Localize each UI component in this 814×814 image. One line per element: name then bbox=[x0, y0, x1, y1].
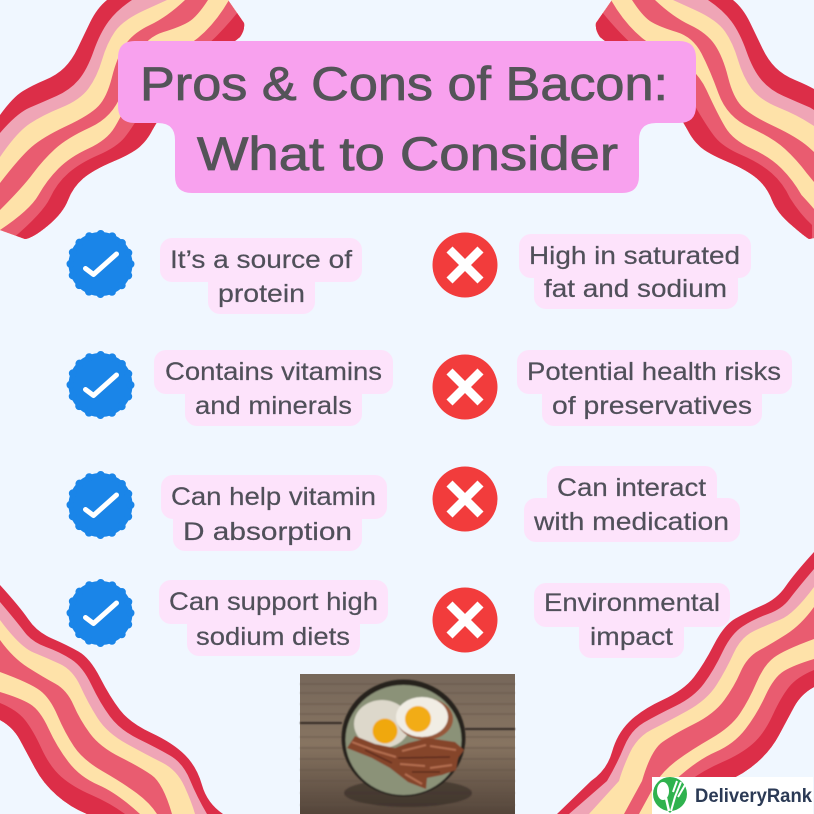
decoration: bottom-right bacon strip bbox=[557, 552, 814, 814]
pro 2: vitamins and minerals: and minerals bbox=[195, 392, 352, 420]
con 4: environmental impact: Environmental bbox=[544, 589, 720, 617]
title bbox=[118, 41, 696, 193]
title: Pros & Cons of Bacon: bbox=[140, 57, 668, 110]
icon: check badge 4 bbox=[68, 581, 132, 645]
logo: DeliveryRank bbox=[652, 777, 813, 814]
icon: cross 2 bbox=[432, 354, 498, 420]
con 4: environmental impact bbox=[534, 583, 730, 658]
con 2: preservatives: Potential health risks bbox=[527, 358, 781, 386]
decoration: top-left bacon strip bbox=[0, 0, 245, 240]
pro 1: source of protein: protein bbox=[218, 280, 305, 308]
icon: cross 3 bbox=[432, 466, 498, 532]
icon: check badge 2 bbox=[68, 353, 132, 417]
pro 1: source of protein bbox=[160, 238, 362, 314]
icon: check badge 1 bbox=[68, 232, 132, 296]
con 3: medication: with medication bbox=[533, 508, 729, 536]
con 1: saturated fat and sodium bbox=[519, 234, 751, 309]
con 3: medication: Can interact bbox=[557, 474, 706, 502]
pro 3: vitamin D absorption: D absorption bbox=[183, 518, 352, 546]
con 1: saturated fat and sodium: fat and sodium bbox=[544, 275, 727, 303]
con 2: preservatives bbox=[517, 350, 792, 426]
pro 4: high sodium diets: sodium diets bbox=[196, 623, 350, 651]
icon: cross 4 bbox=[432, 588, 498, 652]
icon: cross 1 bbox=[432, 232, 498, 298]
pro 4: high sodium diets bbox=[159, 580, 388, 656]
decoration: bottom-left bacon strip bbox=[0, 585, 223, 814]
con 2: preservatives: of preservatives bbox=[552, 392, 752, 420]
title: What to Consider bbox=[197, 127, 618, 180]
icon: spoon and fork bbox=[653, 777, 687, 813]
pro 3: vitamin D absorption bbox=[161, 475, 387, 551]
con 1: saturated fat and sodium: High in saturated bbox=[529, 242, 740, 270]
pro 2: vitamins and minerals bbox=[154, 350, 393, 426]
con 4: environmental impact: impact bbox=[590, 623, 673, 651]
con 3: medication bbox=[524, 466, 740, 542]
decoration: top-right bacon strip bbox=[595, 0, 814, 240]
pro 1: source of protein: It’s a source of bbox=[170, 246, 352, 274]
pro 3: vitamin D absorption: Can help vitamin bbox=[171, 483, 376, 511]
photo: plate of eggs and bacon bbox=[300, 674, 515, 814]
pro 4: high sodium diets: Can support high bbox=[169, 588, 378, 616]
pro 2: vitamins and minerals: Contains vitamins bbox=[165, 358, 382, 386]
icon: check badge 3 bbox=[68, 473, 132, 537]
